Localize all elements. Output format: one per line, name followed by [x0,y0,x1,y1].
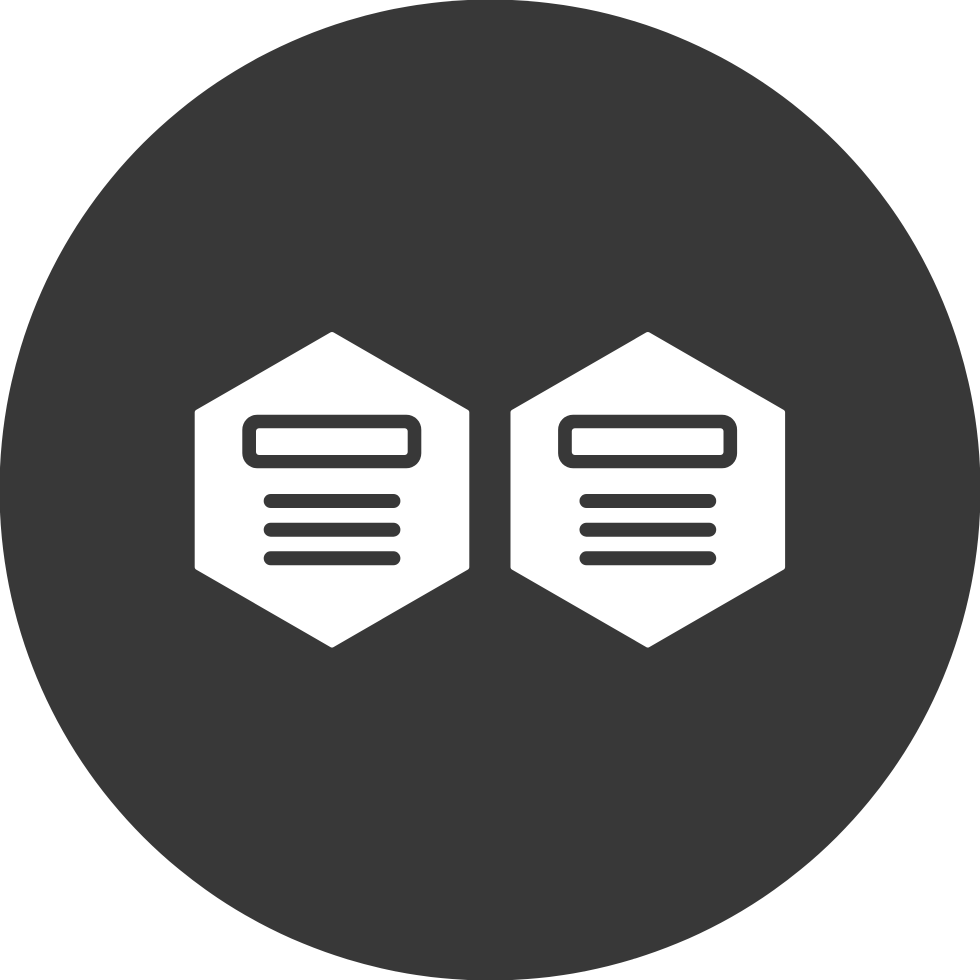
left title box [242,415,421,468]
right hexagon body [514,335,782,644]
left hexagon body [198,335,466,644]
icon: right hexagon document [514,335,782,644]
left text lines [264,494,400,565]
right title box [558,415,737,468]
right text lines [580,494,716,565]
icon: left hexagon document [198,335,466,644]
